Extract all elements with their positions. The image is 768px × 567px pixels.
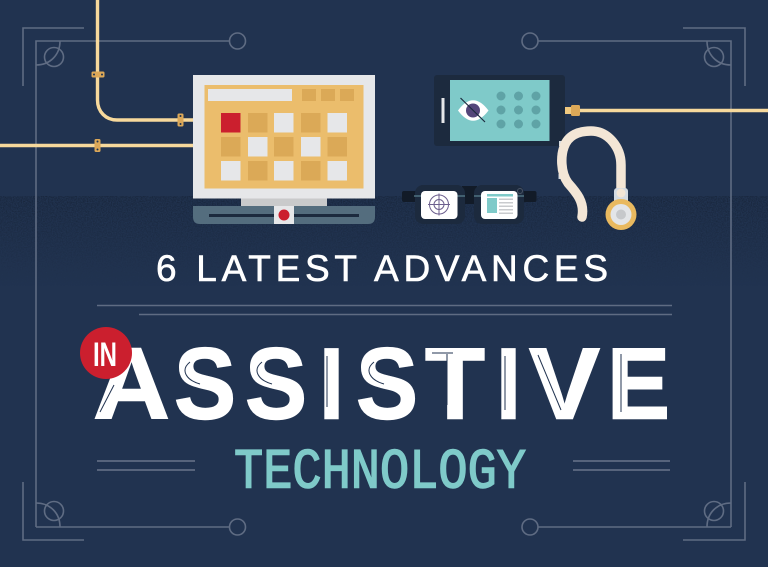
heading rules — [97, 306, 672, 314]
side rules — [97, 461, 670, 470]
heading: assistive — [93, 328, 670, 440]
icon: hearing aid — [558, 131, 636, 230]
heading: 6 latest advances: 6 LATEST ADVANCES — [156, 248, 608, 289]
heading: assistive: T — [425, 328, 485, 440]
heading: assistive: A — [93, 328, 170, 440]
heading: assistive: S — [174, 328, 236, 440]
icon: smart glasses — [402, 185, 536, 224]
title inlay cuts — [100, 353, 621, 412]
heading: assistive: I — [496, 328, 521, 440]
heading: technology: TECHNOLOGY — [234, 442, 526, 506]
heading: assistive: V — [529, 328, 600, 440]
frame corner: bottom left — [23, 482, 246, 540]
frame sides — [36, 240, 731, 527]
icon: smartphone — [434, 75, 565, 146]
badge: in: IN — [93, 336, 117, 374]
heading: assistive: I — [319, 328, 344, 440]
cable: straight left — [0, 144, 193, 147]
heading: assistive: S — [245, 328, 307, 440]
lens: target — [421, 191, 458, 219]
heading: assistive: E — [607, 328, 670, 440]
cable: curved — [98, 0, 193, 120]
lens: article — [481, 191, 518, 219]
frame corner: top left — [23, 28, 246, 240]
heading: assistive: S — [356, 328, 418, 440]
icon: desktop monitor — [193, 75, 375, 224]
frame corner: bottom right — [522, 482, 745, 540]
cable clips — [92, 72, 184, 152]
phone cable — [565, 105, 768, 116]
frame corner: top right — [522, 28, 745, 240]
cables — [0, 0, 193, 152]
badge: in — [80, 327, 132, 379]
